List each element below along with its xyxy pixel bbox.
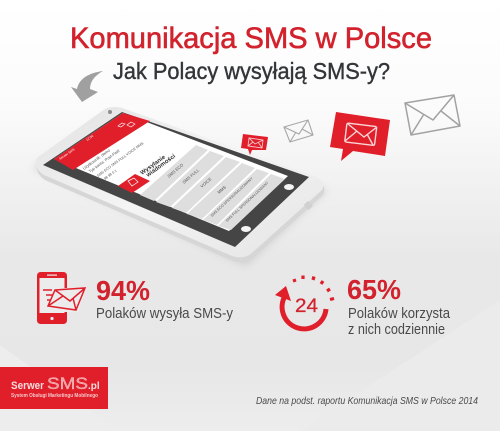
subtitle: Jak Polacy wysyłają SMS-y?	[113, 58, 390, 84]
caption: z nich codziennie	[348, 322, 445, 338]
screen header: 12:34	[85, 134, 94, 142]
send message panel: Wysyłanie	[140, 154, 167, 177]
stat: 94 percent	[37, 272, 234, 324]
icon: small outline envelope	[284, 120, 313, 142]
phone buttons	[241, 184, 294, 232]
icon: large red message bubble	[330, 112, 390, 161]
icon: curved grey arrow	[71, 71, 103, 102]
account information: 98 98 0 1	[103, 169, 118, 181]
send message panel	[118, 153, 177, 193]
logo: System Obsługi Marketingu Mobilnego	[11, 393, 99, 399]
caption: Polaków wysyła SMS-y	[96, 306, 234, 322]
title: Komunikacja SMS w Polsce	[70, 22, 432, 55]
menu labels: SMS ECO SPERSONALIZOWANY	[210, 176, 254, 218]
menu buttons	[140, 145, 285, 230]
percentage: 94%	[96, 275, 150, 306]
menu labels: MMS	[216, 184, 227, 195]
icon: 24-hour clock arrow: 24	[295, 296, 318, 317]
logo: SMS	[47, 374, 88, 393]
phone camera	[108, 110, 112, 114]
account information: Użytkownik: demo	[82, 147, 111, 171]
icon: 24-hour clock arrow	[275, 276, 334, 329]
percentage: 65%	[347, 274, 401, 305]
stat: 65 percent	[275, 274, 451, 338]
menu labels: VOICE	[199, 176, 213, 189]
menu labels	[166, 162, 270, 223]
caption: Polaków korzysta	[348, 306, 451, 322]
send message panel: wiadomości	[145, 153, 177, 179]
menu labels: SMS ECO	[166, 162, 185, 179]
menu labels: SMS FULL	[181, 167, 201, 185]
menu labels: SMS FULL SPERSONALIZOWANY	[225, 180, 270, 223]
icon: phone with envelope	[37, 272, 86, 324]
logo: Serwer	[11, 380, 45, 392]
screen header	[54, 113, 150, 170]
logo	[0, 367, 108, 409]
account information: Typ konta: Post-Paid	[88, 148, 120, 174]
account information: SMS ECO SMS FULL VOICE MMS	[96, 141, 145, 178]
logo: .pl	[88, 381, 100, 392]
phone	[32, 107, 328, 266]
account information	[82, 141, 145, 181]
caption	[348, 306, 451, 338]
screen header: Serwer SMS	[58, 148, 75, 161]
icon: large outline envelope	[405, 95, 460, 135]
icon: small red message bubble	[241, 134, 268, 155]
